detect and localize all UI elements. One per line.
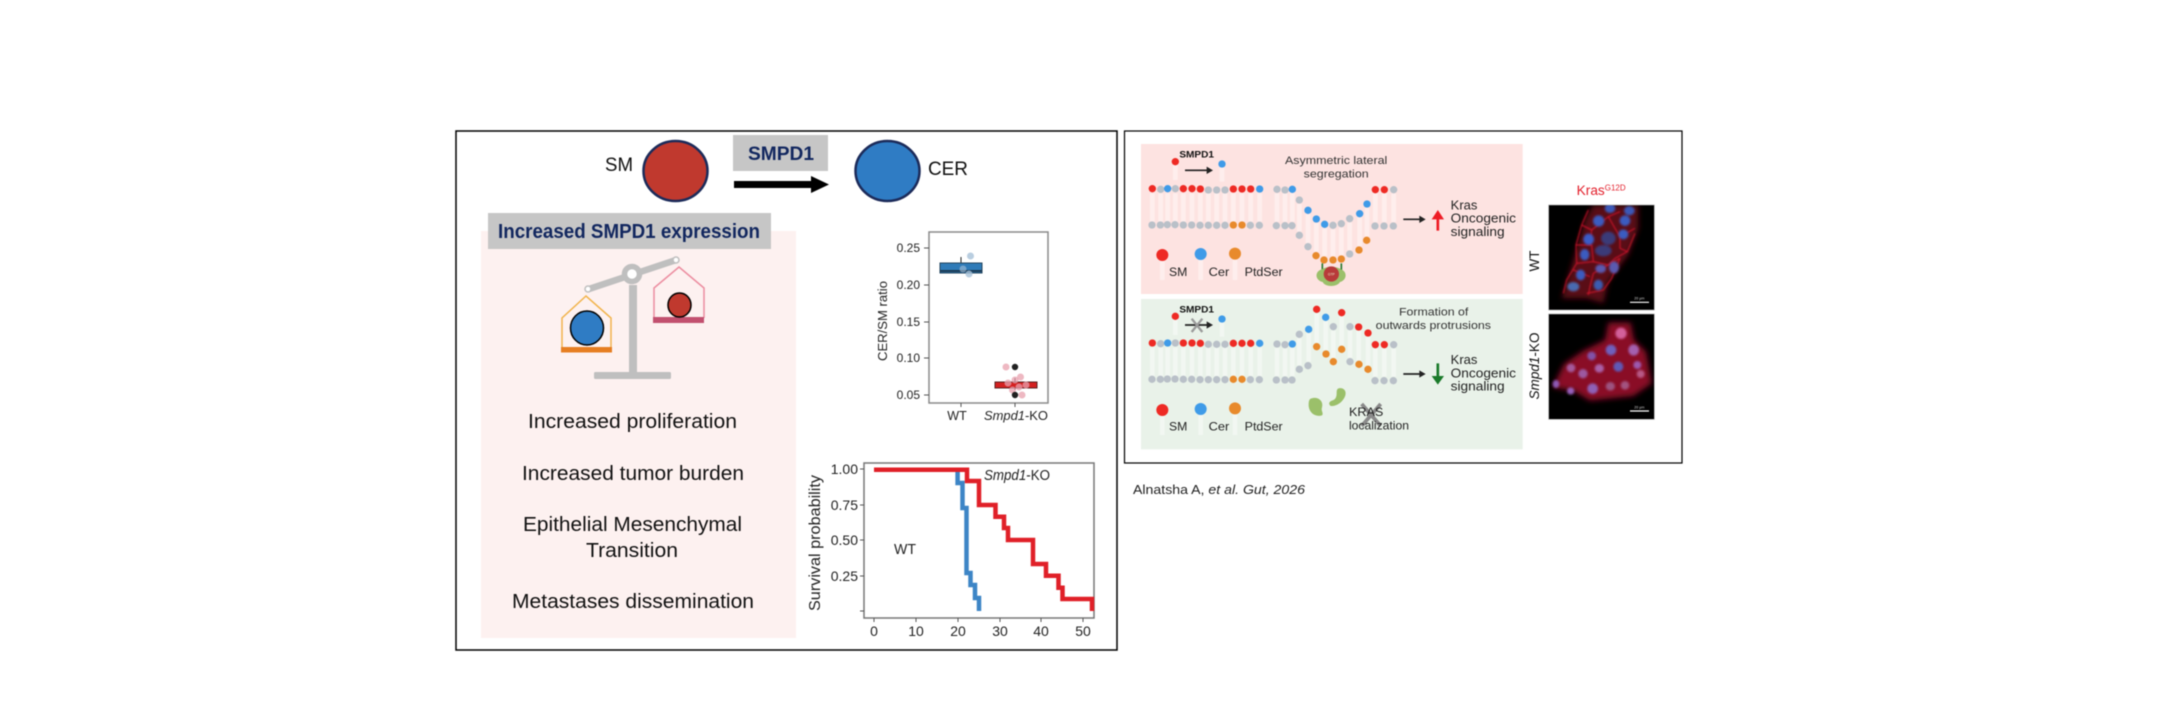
row label: WT: WT	[1527, 250, 1542, 272]
text: Kras oncogenic signaling decreased: signaling	[1451, 379, 1505, 394]
protruding membrane	[1273, 306, 1397, 384]
panel: increased SMPD1 effects	[481, 213, 796, 638]
text list: phenotype effects: Epithelial Mesenchymal	[523, 514, 742, 536]
text: Kras oncogenic signaling increased: Oncogenic	[1451, 211, 1517, 226]
chart: CER/SM ratio box plot: WT	[947, 409, 967, 423]
SMPD1 conversion: SMPD1	[1179, 149, 1214, 159]
annotation: outwards protrusions: Formation of	[1399, 306, 1469, 318]
chart: survival curve: 20	[950, 623, 966, 639]
micrograph: WT: 20 µm	[1634, 297, 1644, 301]
annotation: asymmetric lateral segregation	[1285, 155, 1387, 181]
SMPD1 conversion	[1172, 149, 1226, 182]
annotation: KRAS localization blocked: localization	[1349, 419, 1409, 432]
panel: right framed figure	[1124, 131, 1682, 463]
ceramide circle and label	[856, 141, 968, 201]
text: Kras oncogenic signaling increased: signaling	[1451, 224, 1505, 239]
annotation: asymmetric lateral segregation: Asymmetric lateral	[1285, 155, 1387, 167]
SMPD1 conversion blocked	[1172, 305, 1226, 337]
chart: survival curve: 0.50	[831, 532, 858, 548]
text: Kras oncogenic signaling decreased	[1451, 352, 1517, 394]
curve: WT	[958, 470, 979, 611]
text list: phenotype effects: Metastases dissemination	[512, 591, 754, 613]
membrane bilayer	[1148, 185, 1263, 229]
annotation: KRAS localization blocked	[1349, 404, 1409, 432]
text list: phenotype effects: Transition	[586, 540, 678, 562]
chart: CER/SM ratio box plot: Smpd1-KO	[984, 409, 1048, 423]
chart: survival curve: 0	[870, 623, 878, 639]
membrane bilayer	[1148, 339, 1263, 383]
enzyme label: SMPD1: SMPD1	[748, 144, 814, 165]
heading: KrasG12D: G12D	[1605, 183, 1626, 192]
legend: lipids: PtdSer	[1245, 420, 1283, 434]
curved membrane	[1273, 186, 1397, 264]
chart: survival curve: 50	[1075, 623, 1091, 639]
legend: lipids: Cer	[1209, 420, 1229, 434]
panel: WT membrane diagram	[1141, 144, 1523, 294]
text list: phenotype effects	[512, 411, 754, 613]
legend: lipids	[1156, 248, 1283, 280]
chart: survival curve	[807, 461, 1094, 639]
chart: CER/SM ratio box plot: CER/SM ratio	[876, 281, 890, 361]
chart: survival curve: 0.75	[831, 497, 858, 513]
text list: phenotype effects: Increased tumor burden	[522, 463, 744, 485]
icon: displaced KRAS fragments	[1309, 388, 1346, 416]
chart: CER/SM ratio box plot: 0.10	[897, 351, 920, 365]
legend: lipids: PtdSer	[1245, 265, 1283, 279]
micrographs column	[1549, 183, 1654, 419]
annotation: outwards protrusions: outwards protrusions	[1376, 320, 1492, 332]
chart: CER/SM ratio box plot: 0.20	[897, 278, 920, 292]
chart: survival curve: WT	[894, 542, 916, 558]
legend: lipids	[1156, 402, 1283, 435]
icon: balance scale	[561, 257, 704, 379]
legend: lipids: SM	[1169, 420, 1187, 434]
annotation: KRAS localization blocked: KRAS	[1349, 406, 1384, 419]
micrograph: Smpd1-KO: 20 µm	[1634, 405, 1644, 409]
sphingomyelin label and circle: SM	[605, 155, 633, 176]
micrograph: WT	[1549, 204, 1654, 310]
annotation: outwards protrusions	[1376, 306, 1492, 332]
legend: lipids: SM	[1169, 265, 1187, 279]
chart: survival curve: 0.25	[831, 568, 858, 584]
legend: lipids: Cer	[1209, 265, 1229, 279]
text: Kras oncogenic signaling decreased: Kras	[1451, 352, 1478, 367]
micrograph: Smpd1-KO	[1549, 314, 1654, 419]
chart: CER/SM ratio box plot	[876, 232, 1048, 423]
chart: survival curve: Smpd1-KO	[984, 468, 1050, 484]
curve: Smpd1-KO	[874, 470, 1092, 611]
sphingomyelin label and circle	[605, 141, 708, 201]
text: Kras oncogenic signaling increased: Kras	[1451, 197, 1478, 212]
enzyme label: SMPD1	[733, 135, 828, 171]
chart: survival curve: 10	[908, 623, 924, 639]
heading: KrasG12D: Kras	[1577, 183, 1605, 198]
icon: KRAS protein: GTP	[1328, 272, 1336, 276]
text: Kras oncogenic signaling increased	[1451, 197, 1517, 239]
row label: Smpd1-KO: Smpd1-KO	[1526, 332, 1542, 400]
text list: phenotype effects: Increased proliferation	[528, 411, 737, 433]
icon: KRAS protein	[1317, 263, 1346, 286]
chart: survival curve: Survival probability	[807, 475, 824, 611]
heading: increased SMPD1 expression	[488, 213, 771, 249]
text: Kras oncogenic signaling decreased: Oncogenic	[1451, 365, 1517, 380]
chart: survival curve: 40	[1033, 623, 1049, 639]
heading: increased SMPD1 expression: Increased SMPD1 expression	[498, 221, 760, 243]
chart: survival curve: 30	[992, 623, 1008, 639]
citation: Alnatsha A, et al. Gut, 2026	[1133, 483, 1305, 497]
ceramide circle and label: CER	[928, 159, 968, 180]
annotation: asymmetric lateral segregation: segregation	[1304, 169, 1369, 181]
arrow to signaling	[1403, 216, 1426, 223]
panel: Smpd1-KO membrane diagram	[1141, 299, 1523, 449]
chart: CER/SM ratio box plot: 0.15	[897, 315, 920, 329]
chart: CER/SM ratio box plot: 0.25	[897, 241, 920, 255]
panel: left framed figure	[456, 131, 1117, 650]
arrow: signaling down	[1432, 363, 1444, 385]
chart: CER/SM ratio box plot: 0.05	[897, 388, 920, 402]
arrow: SM to CER	[734, 176, 829, 193]
arrow to signaling	[1403, 370, 1426, 378]
arrow: signaling up	[1432, 210, 1444, 231]
SMPD1 conversion blocked: SMPD1	[1179, 305, 1214, 315]
chart: survival curve: 1.00	[831, 461, 858, 477]
